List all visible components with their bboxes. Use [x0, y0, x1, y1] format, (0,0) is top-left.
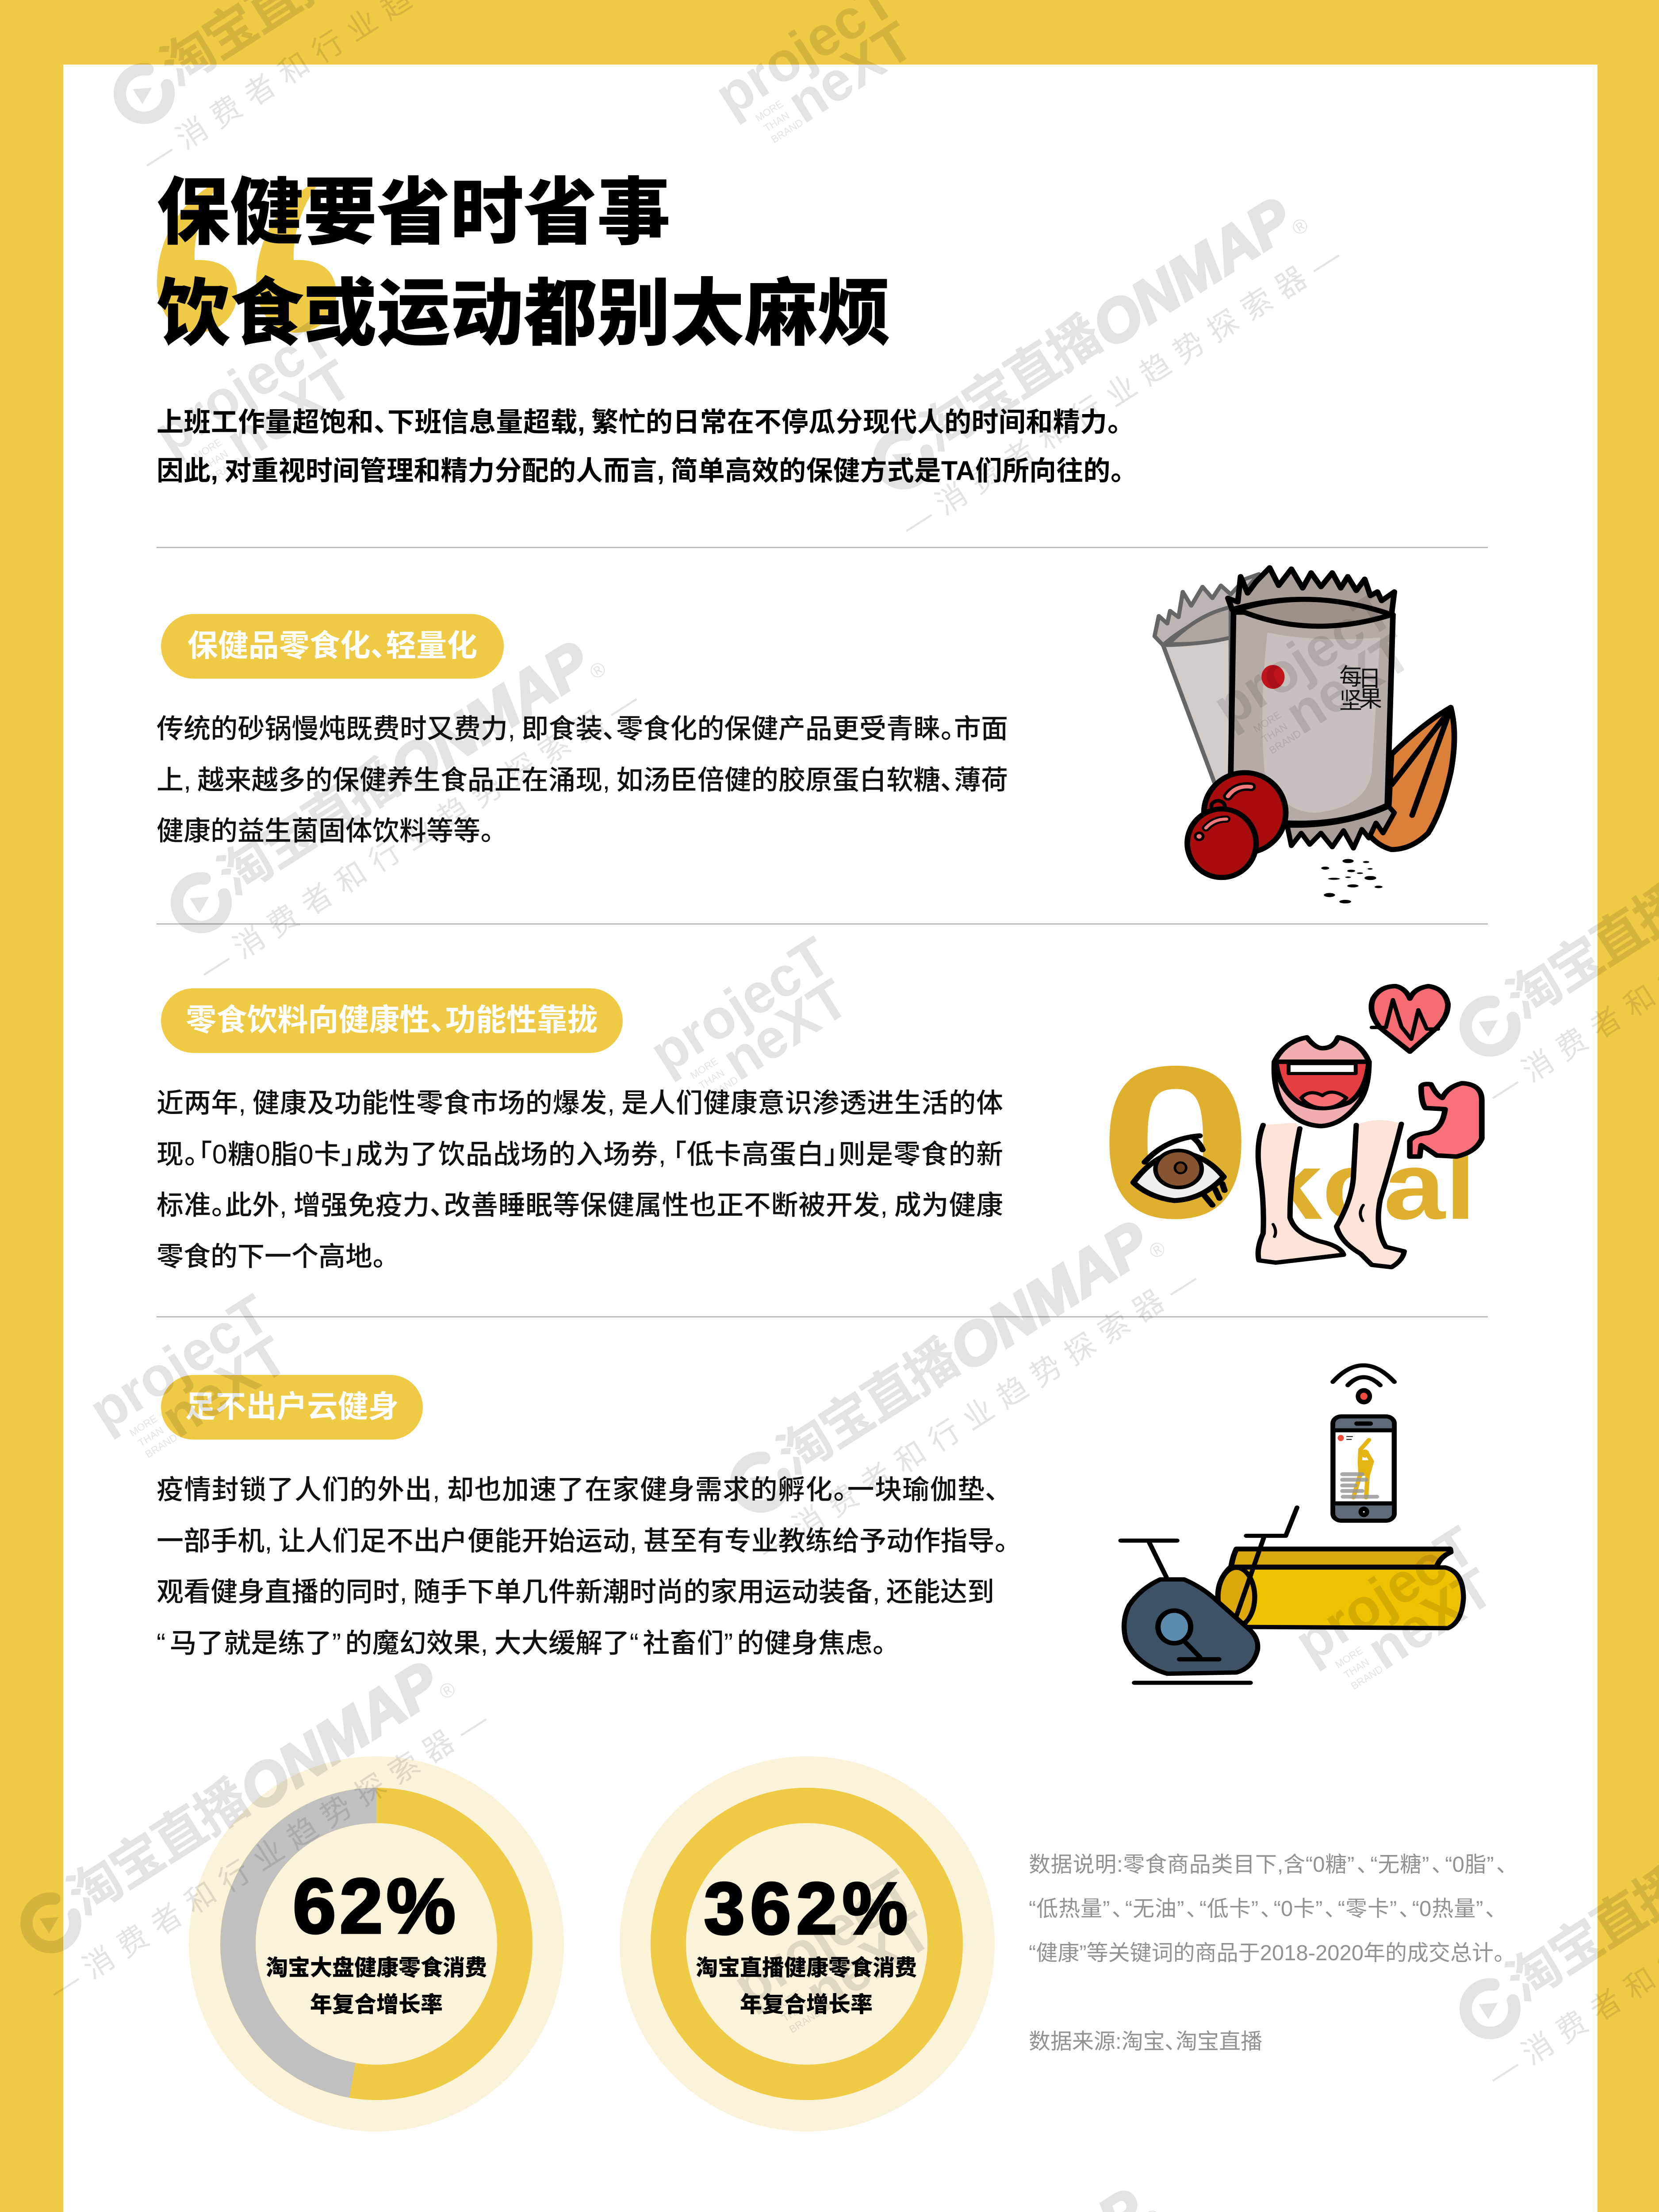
- watermarks: projecT: [723, 1858, 924, 2017]
- title: 保健要省时省事: [157, 172, 670, 254]
- watermarks: 淘宝直播: [768, 1329, 969, 1486]
- watermarks: ONMAP: [378, 629, 602, 804]
- section text: home fitness: [157, 1464, 1012, 1669]
- watermarks: ®: [1288, 213, 1312, 240]
- chart: 362% growth donut: 年复合增长率: [740, 1992, 873, 2017]
- watermarks: projecT: [143, 307, 345, 466]
- watermarks: BRAND: [769, 116, 805, 145]
- chart: 62% growth donut: [189, 1756, 564, 2131]
- illustration: 0 kcal with body organs: kcal: [1261, 1133, 1476, 1239]
- data note: “健康”等关键词的商品于2018-2020年的成交总计。: [1029, 1941, 1504, 1965]
- watermarks: 淘宝直播: [58, 1769, 259, 1927]
- data note: “低热量”、“无油”、“低卡”、“0卡”、“零卡”、“0热量”、: [1029, 1897, 1498, 1921]
- section text: snack-style supplements: 健康的益生菌固体饮料等等。: [157, 816, 494, 846]
- section heading: home fitness: 足不出户云健身: [185, 1390, 399, 1424]
- section text: home fitness: 疫情封锁了人们的外出,却也加速了在家健身需求的孵化。一块瑜伽垫、: [157, 1475, 999, 1505]
- illustration: nut snack bag with cherries and almond: [1154, 568, 1454, 903]
- section text: home fitness: “马了就是练了”的魔幻效果,大大缓解了“社畜们”的健身焦虑。: [157, 1628, 886, 1658]
- watermarks: MORE: [753, 98, 785, 124]
- watermarks: MORE: [1251, 709, 1283, 735]
- bag label text: 坚: [1339, 688, 1362, 714]
- watermarks: neXT: [215, 349, 363, 473]
- watermarks: MORE: [771, 1988, 803, 2014]
- watermarks: BRAND: [208, 455, 244, 484]
- section text: snack-style supplements: 传统的砂锅慢炖既费时又费力,即食装、零食化的保健产品更受青睐。市面: [157, 714, 1008, 744]
- chart: 62% growth donut: 62%: [293, 1863, 459, 1950]
- watermarks: MORE: [1333, 1644, 1365, 1671]
- watermarks: neXT: [1275, 621, 1422, 745]
- watermarks: THAN: [697, 1067, 726, 1091]
- section text: functional snacks and drinks: [157, 1078, 1012, 1282]
- watermarks: BRAND: [787, 2006, 824, 2035]
- bag label text: 果: [1359, 687, 1382, 712]
- watermarks: 淘宝直播: [208, 749, 410, 906]
- watermarks: projecT: [1284, 1515, 1486, 1674]
- watermarks: THAN: [780, 1999, 809, 2024]
- watermarks: —消费者和行业趋势探索器—: [43, 1697, 502, 2007]
- watermarks: projecT: [1203, 579, 1404, 738]
- watermarks: neXT: [712, 968, 859, 1092]
- section heading: home fitness: [161, 1375, 423, 1440]
- watermarks: THAN: [201, 448, 230, 472]
- section text: functional snacks and drinks: 现。「0糖0脂0卡」成为了饮品战场的入场券,「低卡高蛋白」则是零食的新: [157, 1139, 1003, 1169]
- watermarks: ®: [1145, 1237, 1169, 1263]
- watermarks: THAN: [762, 109, 791, 134]
- chart: 62% growth donut: 淘宝大盘健康零食消费: [266, 1955, 487, 1980]
- data source: 数据来源:淘宝、淘宝直播: [1029, 2030, 1262, 2054]
- bag label text: [1339, 664, 1382, 714]
- bag label text: 日: [1358, 666, 1381, 692]
- section text: functional snacks and drinks: 近两年,健康及功能性零食市场的爆发,是人们健康意识渗透进生活的体: [157, 1088, 1003, 1118]
- watermarks: THAN: [1342, 1656, 1371, 1681]
- illustration: 0 kcal with body organs: [1099, 986, 1482, 1267]
- illustration: 0 kcal with body organs: 0: [1099, 1022, 1253, 1263]
- watermarks: neXT: [1356, 1557, 1504, 1681]
- chart: 362% growth donut: [620, 1756, 995, 2131]
- section text: functional snacks and drinks: 标准。此外,增强免疫力、改善睡眠等保健属性也正不断被开发,成为健康: [157, 1190, 1003, 1220]
- watermarks: ®: [435, 1677, 460, 1704]
- watermarks: —消费者和行业趋势探索器—: [753, 1257, 1212, 1567]
- section text: functional snacks and drinks: 零食的下一个高地。: [157, 1241, 386, 1271]
- watermarks: neXT: [151, 1325, 298, 1449]
- watermarks: BRAND: [143, 1431, 180, 1460]
- section heading: functional snacks and drinks: [161, 988, 623, 1053]
- section text: home fitness: 观看健身直播的同时,随手下单几件新潮时尚的家用运动装备,还能达到: [157, 1577, 994, 1607]
- title: 饮食或运动都别太麻烦: [157, 273, 891, 355]
- chart: 362% growth donut: 362%: [704, 1868, 913, 1950]
- watermarks: BRAND: [704, 1074, 740, 1102]
- section text: snack-style supplements: 上,越来越多的保健养生食品正在涌现,如汤臣倍健的胶原蛋白软糖、薄荷: [157, 765, 1008, 795]
- chart: 362% growth donut: 淘宝直播健康零食消费: [696, 1955, 917, 1980]
- watermarks: BRAND: [1267, 727, 1303, 756]
- chart: 62% growth donut: 年复合增长率: [310, 1992, 443, 2017]
- intro text: 因此,对重视时间管理和精力分配的人而言,简单高效的保健方式是TA们所向往的。: [157, 456, 1124, 486]
- watermarks: THAN: [1260, 720, 1289, 745]
- watermarks: —消费者和行业趋势探索器—: [896, 234, 1355, 543]
- watermarks: ®: [586, 657, 610, 684]
- section text: home fitness: 一部手机,让人们足不出户便能开始运动,甚至有专业教练给予动作指导。: [157, 1526, 1008, 1556]
- watermarks: ONMAP: [938, 1208, 1161, 1384]
- watermarks: MORE: [127, 1413, 159, 1439]
- data note: 数据说明:零食商品类目下,含“0糖”、“无糖”、“0脂”、: [1029, 1853, 1510, 1877]
- bag label text: 每: [1339, 664, 1362, 690]
- watermarks: THAN: [136, 1424, 165, 1449]
- icon: yellow quotation mark: [157, 179, 336, 333]
- intro text: 上班工作量超饱和、下班信息量超载,繁忙的日常在不停瓜分现代人的时间和精力。: [157, 407, 1121, 437]
- illustration: phone, yoga mat and exercise bike: [1121, 1365, 1464, 1683]
- section heading: snack-style supplements: 保健品零食化、轻量化: [188, 629, 477, 663]
- watermarks: MORE: [192, 436, 224, 462]
- watermarks: ONMAP: [1080, 185, 1304, 361]
- watermarks: MORE: [688, 1055, 720, 1081]
- section heading: functional snacks and drinks: 零食饮料向健康性、功能性靠拢: [186, 1003, 598, 1037]
- watermarks: BRAND: [1349, 1663, 1385, 1692]
- watermarks: projecT: [79, 1283, 280, 1442]
- watermarks: projecT: [640, 926, 841, 1085]
- watermarks: neXT: [777, 10, 924, 134]
- watermarks: ONMAP: [228, 1649, 451, 1824]
- intro text: [157, 398, 1125, 495]
- section heading: snack-style supplements: [161, 614, 504, 679]
- section text: snack-style supplements: [157, 703, 1012, 857]
- title: [157, 163, 891, 365]
- watermarks: 淘宝直播: [911, 305, 1112, 463]
- watermarks: —消费者和行业趋势探索器—: [194, 677, 653, 987]
- watermarks: neXT: [795, 1900, 942, 2024]
- data note: [1029, 1843, 1515, 1975]
